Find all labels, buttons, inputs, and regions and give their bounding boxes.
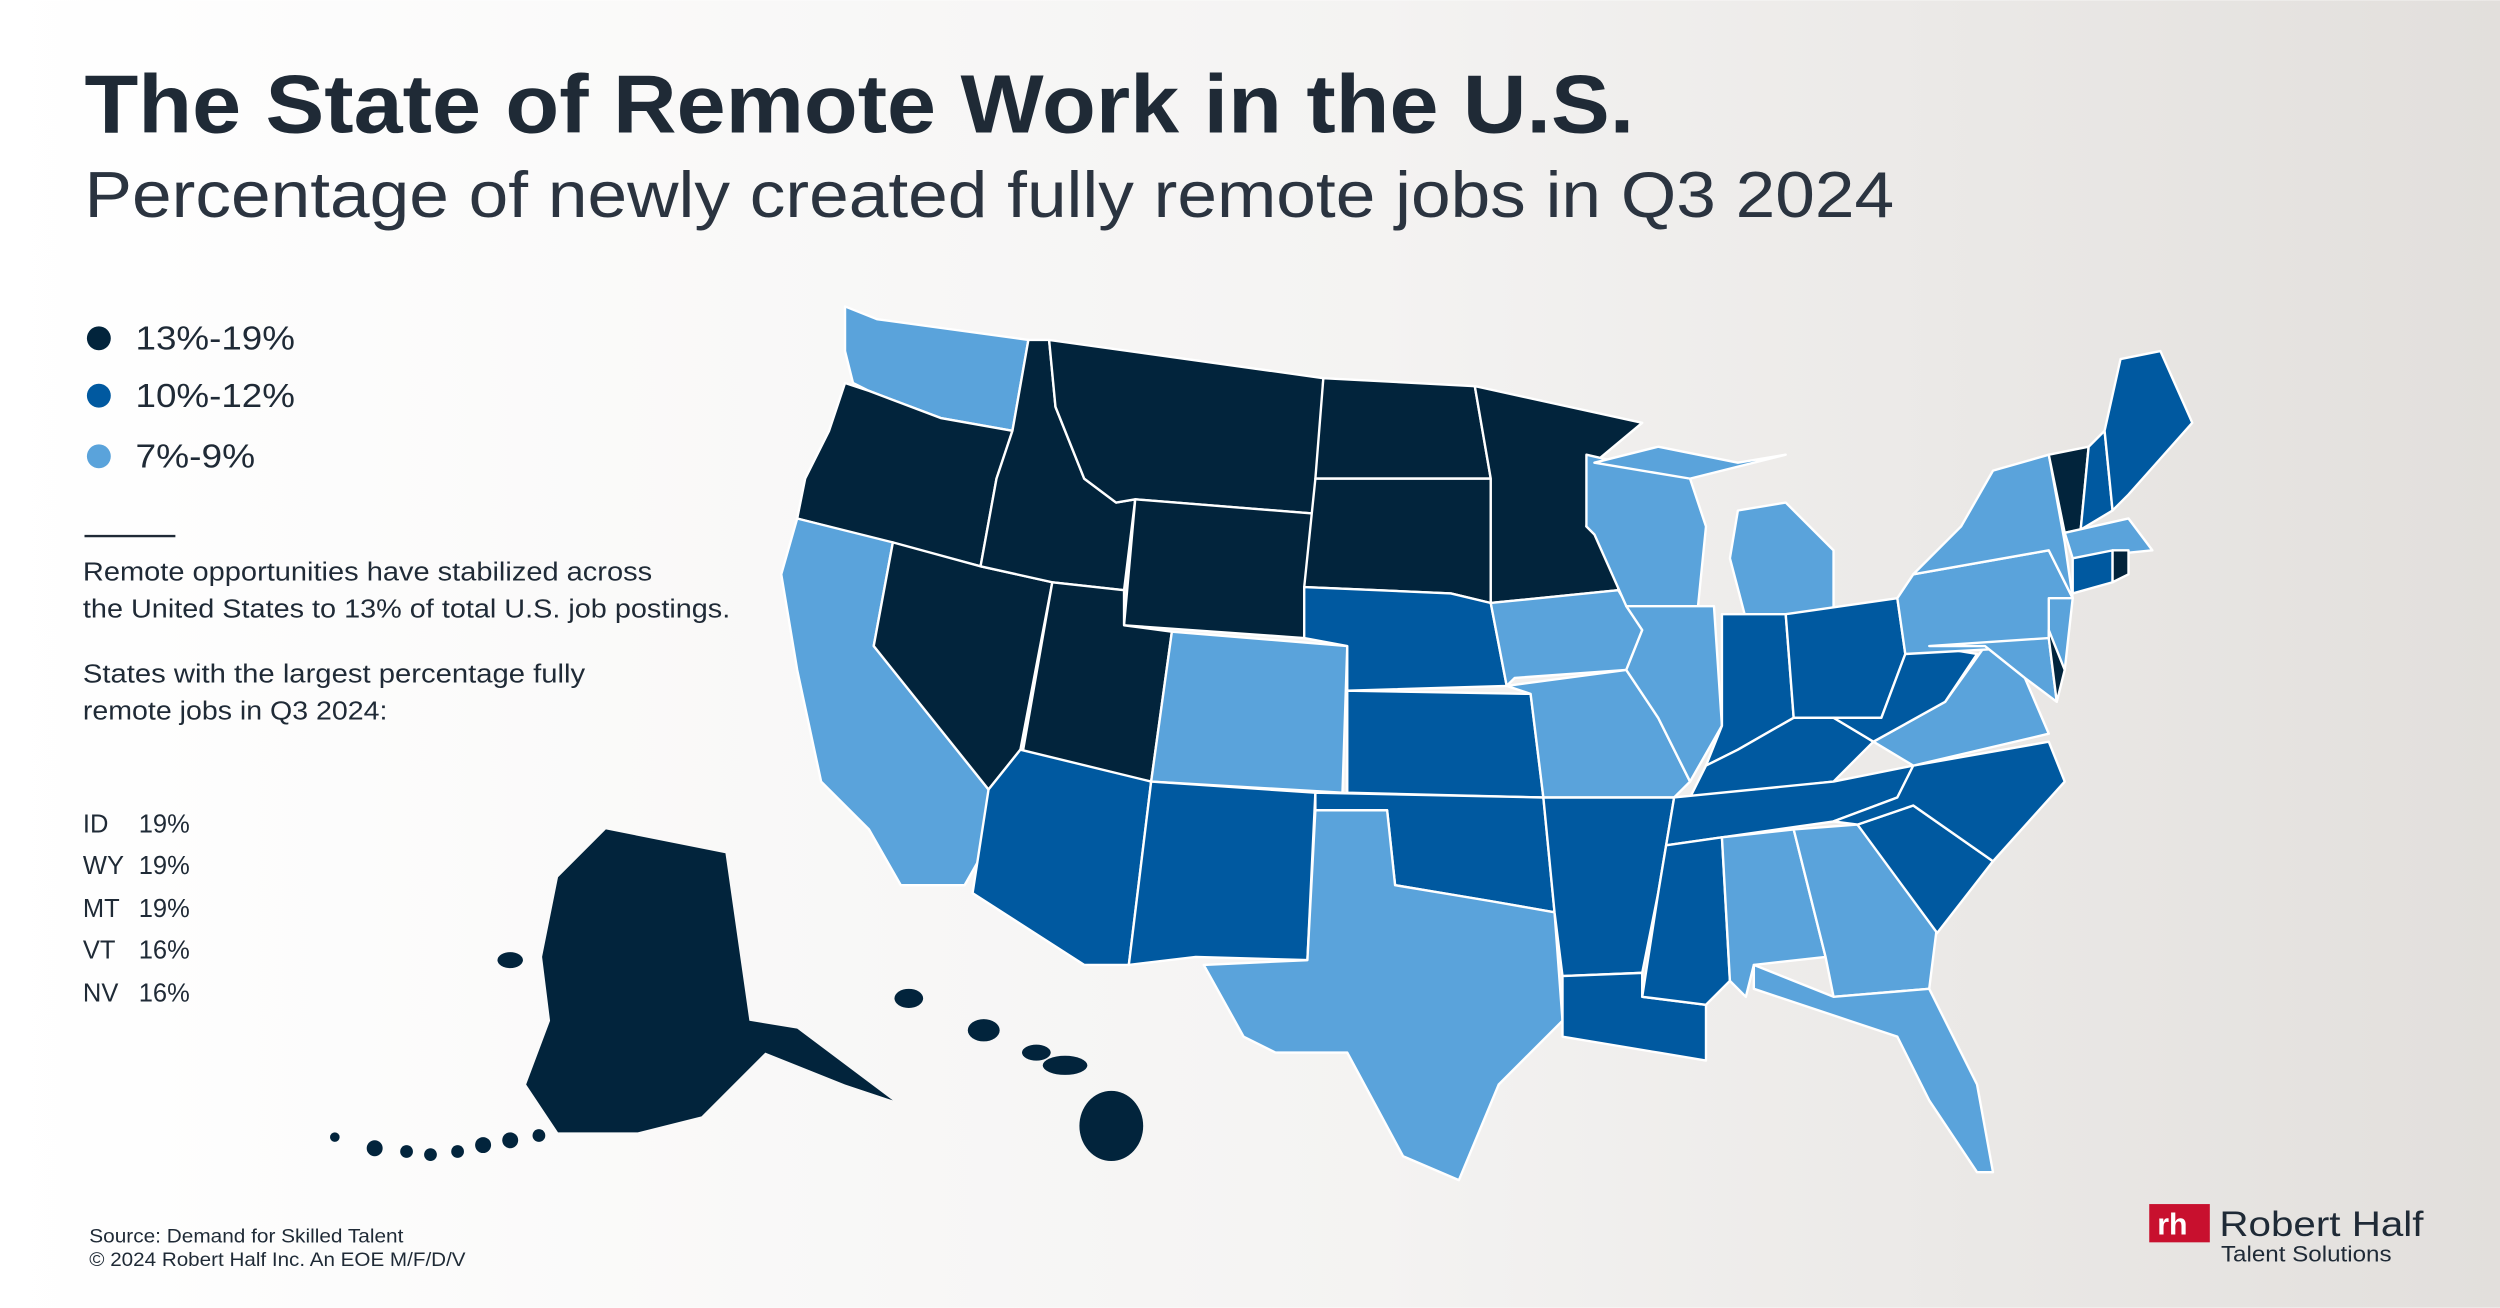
body text — [83, 557, 730, 725]
top states list: 16% — [139, 980, 190, 1008]
source — [89, 1226, 466, 1271]
top states list: 19% — [139, 811, 190, 839]
top states list: WY — [83, 852, 124, 880]
top states list: 16% — [139, 937, 190, 965]
body text: the United States to 13% of total U.S. job postings. — [83, 593, 730, 623]
subtitle: Percentage of newly created fully remote jobs in Q3 2024 — [85, 158, 1894, 231]
title: The State of Remote Work in the U.S. — [85, 58, 1634, 151]
top states list — [83, 811, 190, 1008]
map — [781, 306, 2192, 1180]
legend: 7%-9% — [136, 438, 255, 475]
top states list: ID — [83, 811, 108, 839]
logo — [2149, 1204, 2424, 1266]
logo: rh — [2157, 1208, 2187, 1241]
body text: States with the largest percentage fully — [83, 659, 586, 689]
top states list: VT — [83, 937, 116, 965]
hawaii — [894, 989, 1143, 1161]
legend: 13%-19% — [136, 320, 295, 357]
body text: Remote opportunities have stabilized across — [83, 557, 652, 587]
logo: Talent Solutions — [2221, 1241, 2392, 1266]
body text: remote jobs in Q3 2024: — [83, 695, 387, 725]
alaska — [330, 829, 893, 1161]
top states list: NV — [83, 980, 118, 1008]
legend — [87, 320, 295, 475]
source: Source: Demand for Skilled Talent — [89, 1226, 404, 1247]
source: © 2024 Robert Half Inc. An EOE M/F/D/V — [89, 1250, 466, 1271]
logo: Robert Half — [2219, 1205, 2424, 1244]
top states list: 19% — [139, 852, 190, 880]
legend: 10%-12% — [136, 378, 295, 415]
top states list: 19% — [139, 895, 190, 923]
top states list: MT — [83, 895, 120, 923]
